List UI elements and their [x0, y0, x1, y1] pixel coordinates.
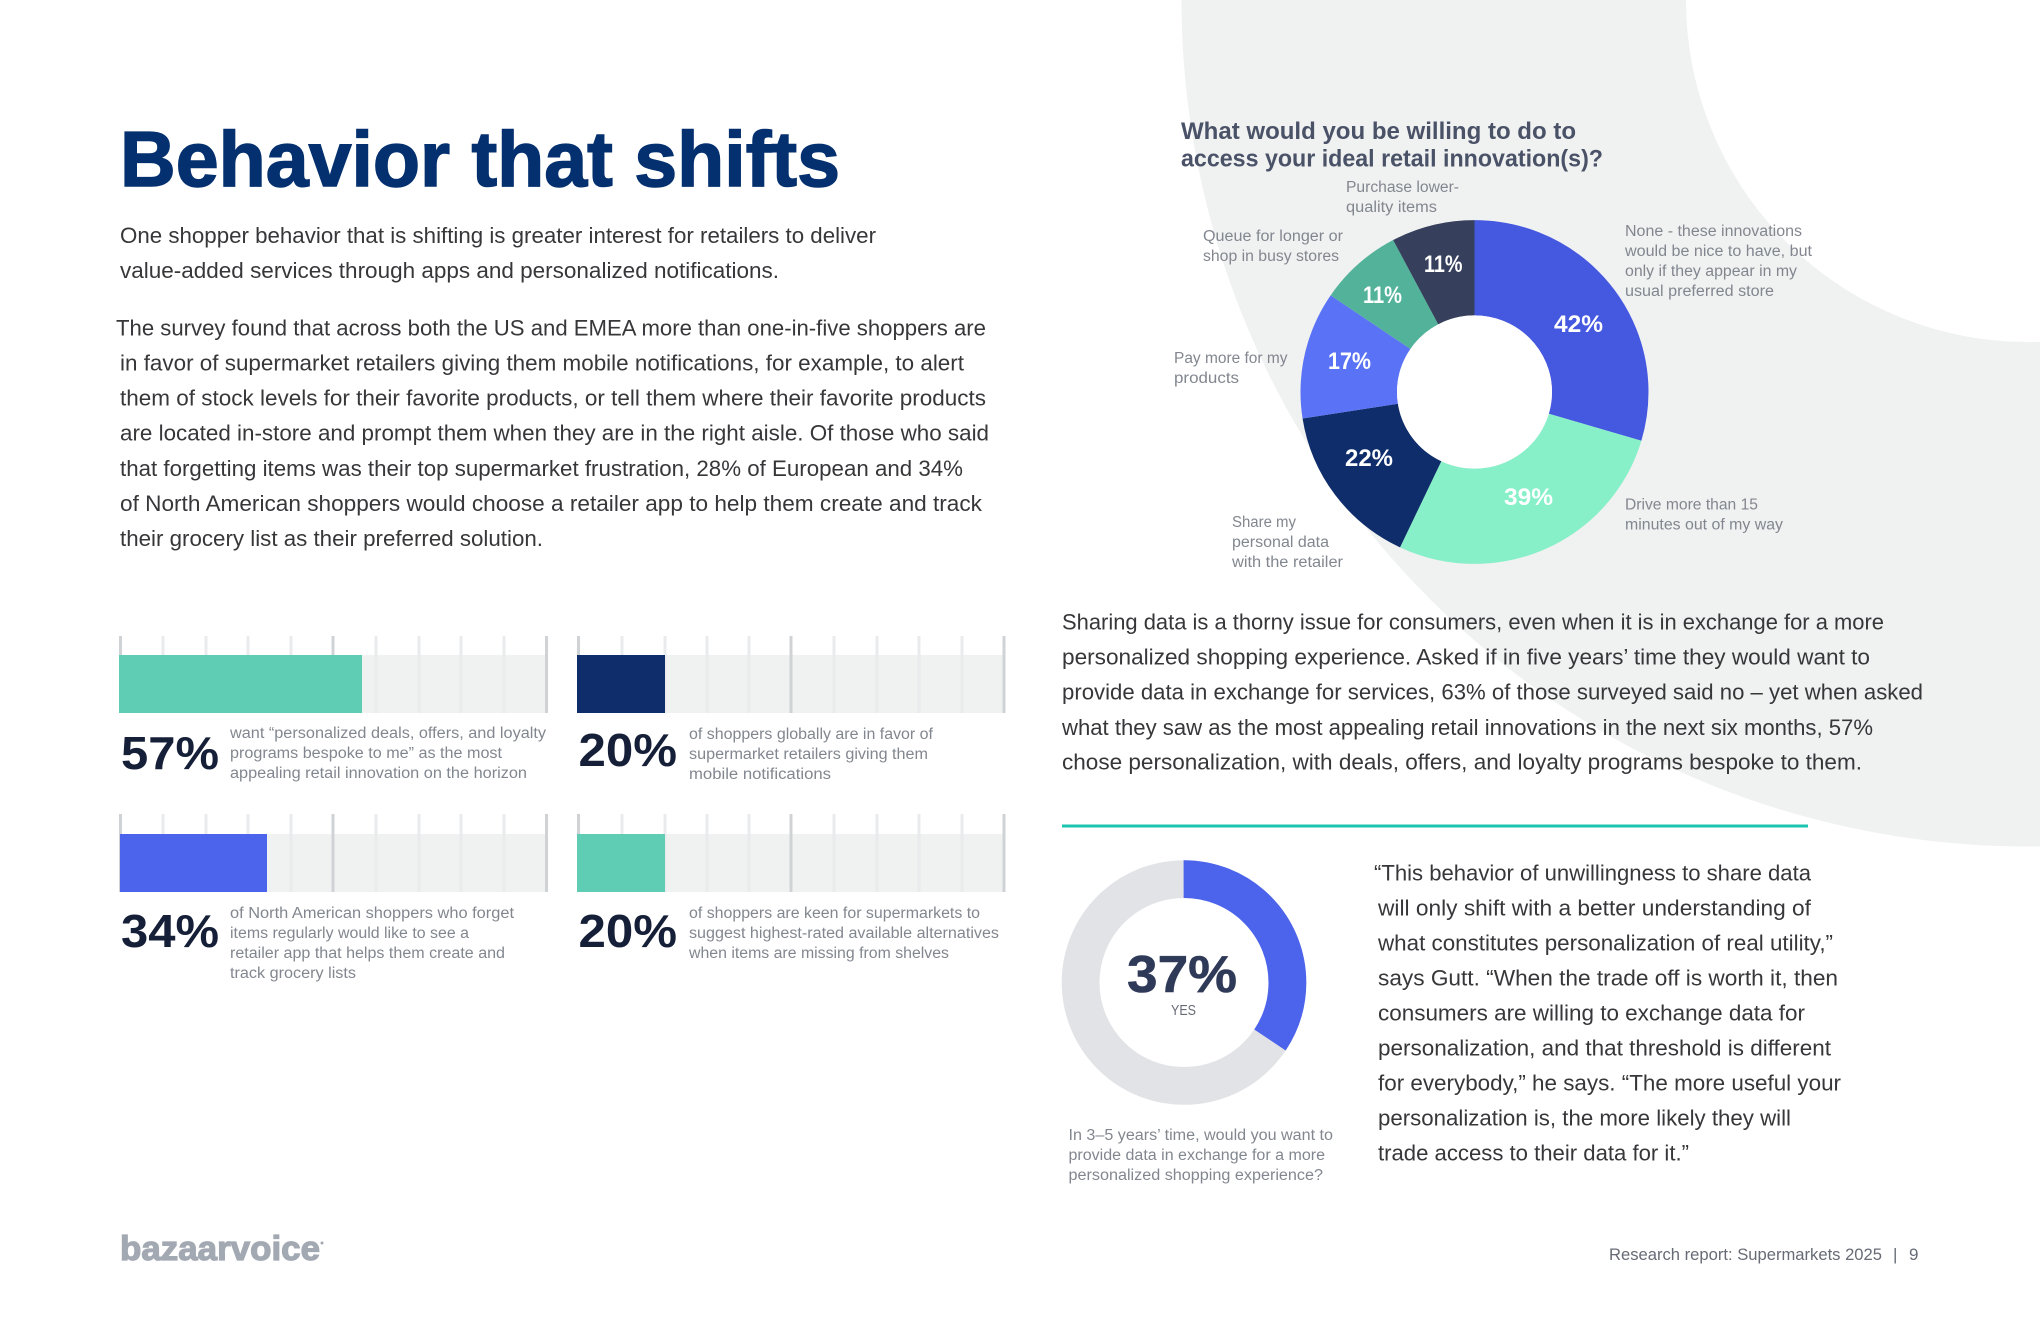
donut values: 39%	[1504, 484, 1553, 511]
quote: consumers are willing to exchange data for	[1378, 1000, 1805, 1026]
body paragraph: survey findings: in favor of supermarket retailers giving them mobile notifications, for example, to alert	[120, 350, 964, 376]
donut values: 22%	[1345, 445, 1393, 472]
caption 34%: of North American shoppers who forget	[230, 905, 515, 922]
donut labels: Pay more for my	[1174, 350, 1288, 367]
title: Behavior that shifts	[120, 115, 840, 203]
donut chart: 37% yes	[1081, 879, 1287, 1086]
donut labels	[1174, 179, 1813, 571]
caption 20%: of shoppers globally are in favor of	[689, 726, 934, 743]
intro text: value-added services through apps and personalized notifications.	[120, 258, 779, 283]
caption 34%	[230, 905, 515, 982]
caption 34%: track grocery lists	[230, 965, 356, 982]
quote: for everybody,” he says. “The more useful your	[1378, 1070, 1841, 1096]
body paragraph: sharing data: provide data in exchange for services, 63% of those surveyed said no – yet when asked	[1062, 680, 1923, 705]
quote: personalization, and that threshold is different	[1378, 1036, 1831, 1060]
footer: 9	[1909, 1245, 1918, 1264]
intro text	[120, 223, 876, 283]
body paragraph: survey findings: that forgetting items was their top supermarket frustration, 28% of European and 34%	[120, 456, 963, 481]
bar 20% navy	[577, 636, 1005, 713]
value 34%: 34%	[121, 905, 219, 957]
quote: will only shift with a better understanding of	[1377, 896, 1812, 921]
donut labels: with the retailer	[1231, 554, 1343, 571]
donut values: 11%	[1424, 251, 1462, 278]
bar 20% teal	[577, 814, 1005, 892]
caption 34%: items regularly would like to see a	[230, 925, 469, 942]
body paragraph: sharing data	[1061, 609, 1923, 774]
donut labels: None - these innovations	[1625, 223, 1802, 240]
quote: personalization is, the more likely they will	[1378, 1106, 1791, 1130]
stat: 57%	[119, 636, 548, 782]
donut labels: quality items	[1346, 199, 1437, 216]
body paragraph: survey findings: their grocery list as their preferred solution.	[120, 526, 543, 551]
body paragraph: survey findings: of North American shoppers would choose a retailer app to help them create and track	[120, 491, 983, 516]
caption 57%	[229, 725, 546, 782]
donut values: 17%	[1328, 348, 1371, 375]
donut caption: personalized shopping experience?	[1068, 1167, 1323, 1184]
caption 20%: suggest highest-rated available alternatives	[689, 925, 999, 942]
logo: bazaarvoice	[120, 1230, 320, 1268]
teal divider	[1062, 824, 1808, 828]
donut chart heading	[1181, 118, 1603, 172]
caption 20%: of shoppers are keen for supermarkets to	[689, 905, 980, 922]
value 20%: 20%	[578, 905, 677, 957]
label yes: YES	[1171, 1002, 1196, 1019]
quote: what constitutes personalization of real utility,”	[1377, 931, 1833, 956]
intro text: One shopper behavior that is shifting is greater interest for retailers to deliver	[120, 223, 876, 248]
quote: trade access to their data for it.”	[1378, 1140, 1689, 1166]
stat: 34%	[119, 814, 548, 982]
value 20%: 20%	[578, 724, 677, 776]
donut values: 11%	[1363, 282, 1402, 309]
caption 20%	[688, 905, 999, 962]
body paragraph: survey findings: The survey found that across both the US and EMEA more than one-in-five shoppers are	[116, 315, 986, 340]
caption 20%: mobile notifications	[689, 766, 831, 783]
donut labels: products	[1174, 370, 1239, 387]
quote: says Gutt. “When the trade off is worth it, then	[1378, 966, 1838, 990]
donut labels: would be nice to have, but	[1624, 243, 1813, 260]
donut labels: Purchase lower-	[1346, 179, 1459, 196]
caption 20%	[689, 726, 934, 783]
donut labels: Queue for longer or	[1203, 228, 1343, 245]
quote	[1374, 860, 1841, 1166]
donut labels: Share my	[1232, 514, 1296, 531]
body paragraph: survey findings	[116, 315, 989, 551]
donut labels: personal data	[1232, 534, 1329, 551]
caption 20%: supermarket retailers giving them	[689, 746, 928, 763]
quote: “This behavior of unwillingness to share data	[1374, 860, 1812, 886]
donut labels: only if they appear in my	[1625, 263, 1797, 280]
caption 57%: want “personalized deals, offers, and loyalty	[229, 725, 546, 742]
body paragraph: sharing data: chose personalization, with deals, offers, and loyalty programs bespoke to them.	[1062, 749, 1862, 774]
caption 57%: programs bespoke to me” as the most	[230, 745, 503, 762]
donut caption	[1068, 1127, 1333, 1184]
donut labels: shop in busy stores	[1203, 248, 1339, 265]
donut labels: Drive more than 15	[1625, 496, 1758, 514]
donut values	[1328, 251, 1603, 511]
body paragraph: sharing data: personalized shopping experience. Asked if in five years’ time they would want to	[1062, 644, 1870, 670]
donut caption: provide data in exchange for a more	[1068, 1147, 1325, 1164]
background ring	[1434, 0, 2040, 594]
stat: 20% mobile notifications	[577, 636, 1005, 783]
donut chart heading: access your ideal retail innovation(s)?	[1181, 146, 1603, 172]
donut labels: minutes out of my way	[1625, 516, 1783, 534]
caption 57%: appealing retail innovation on the horizon	[230, 765, 527, 782]
footer: Research report: Supermarkets 2025	[1609, 1245, 1882, 1264]
value 37%: 37%	[1127, 946, 1237, 1004]
donut labels: usual preferred store	[1625, 283, 1774, 300]
body paragraph: sharing data: Sharing data is a thorny issue for consumers, even when it is in exchange for a more	[1062, 609, 1884, 634]
stat: 20% alternatives	[577, 814, 1005, 962]
donut chart: willingness	[1328, 251, 1603, 516]
footer: |	[1893, 1245, 1897, 1264]
donut chart heading: What would you be willing to do to	[1181, 118, 1576, 145]
bar 57%	[119, 636, 548, 713]
caption 34%: retailer app that helps them create and	[230, 945, 505, 962]
body paragraph: sharing data: what they saw as the most appealing retail innovations in the next six months, 57%	[1061, 715, 1873, 740]
caption 20%: when items are missing from shelves	[688, 945, 949, 962]
bar 34%	[119, 814, 548, 892]
value 57%: 57%	[121, 727, 219, 779]
body paragraph: survey findings: are located in-store and prompt them when they are in the right aisle. Of those who said	[120, 421, 989, 446]
donut values: 42%	[1554, 311, 1603, 338]
donut caption: In 3–5 years’ time, would you want to	[1068, 1127, 1333, 1144]
body paragraph: survey findings: them of stock levels for their favorite products, or tell them where their favorite products	[120, 386, 986, 411]
